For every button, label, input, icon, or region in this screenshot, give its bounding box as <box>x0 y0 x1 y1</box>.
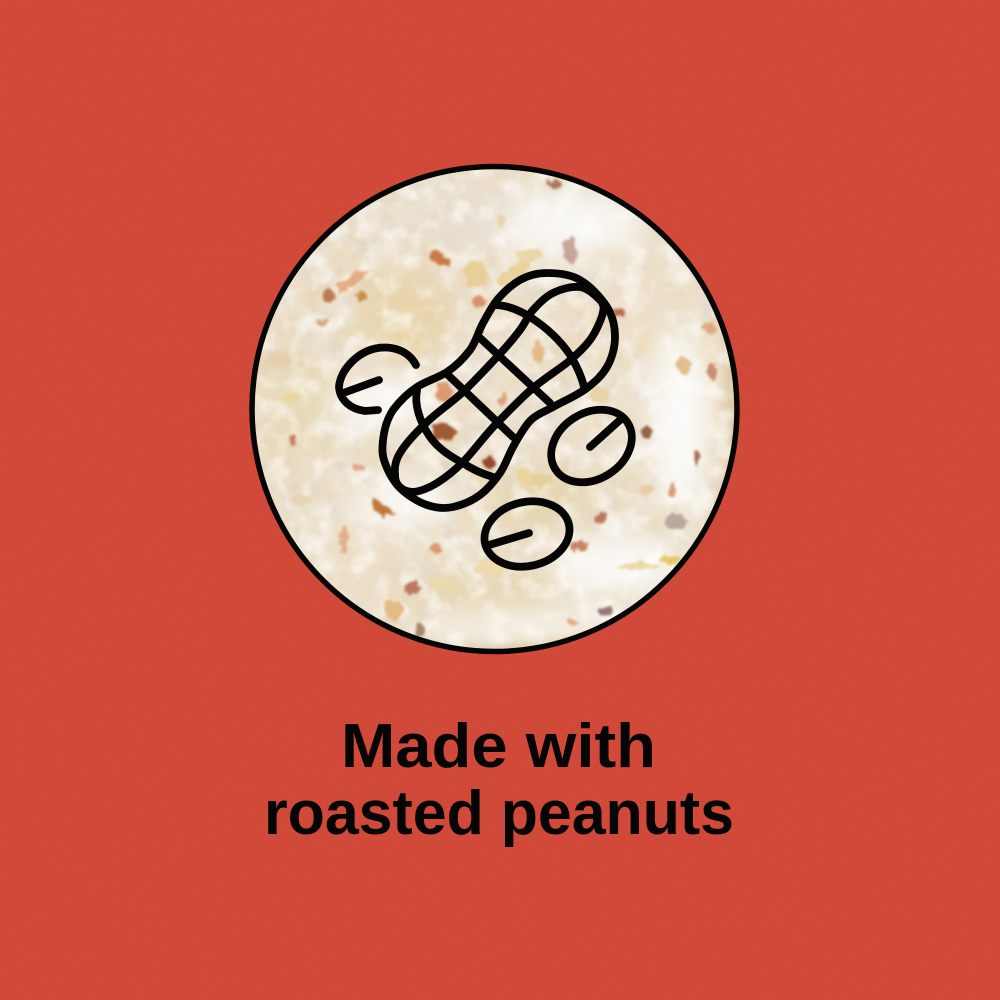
panel: peanut texture disc <box>240 155 750 665</box>
icon: right peanut kernel <box>537 395 646 497</box>
peanut shell outline <box>382 273 615 508</box>
peanut cross line 4 <box>416 390 493 477</box>
icon: bottom peanut kernel <box>478 493 576 575</box>
slab edges of the texture <box>259 329 734 649</box>
title: roasted peanuts <box>264 779 734 848</box>
icon: peanut <box>382 273 615 508</box>
icon: left peanut half <box>339 348 416 411</box>
peanut cross line 1 <box>494 305 584 387</box>
peanut cross line 3 <box>448 375 513 437</box>
peanut cross line 2 <box>480 338 550 403</box>
title <box>264 712 734 848</box>
peanut inner ellipse <box>395 287 604 492</box>
title: Made with <box>341 712 656 781</box>
